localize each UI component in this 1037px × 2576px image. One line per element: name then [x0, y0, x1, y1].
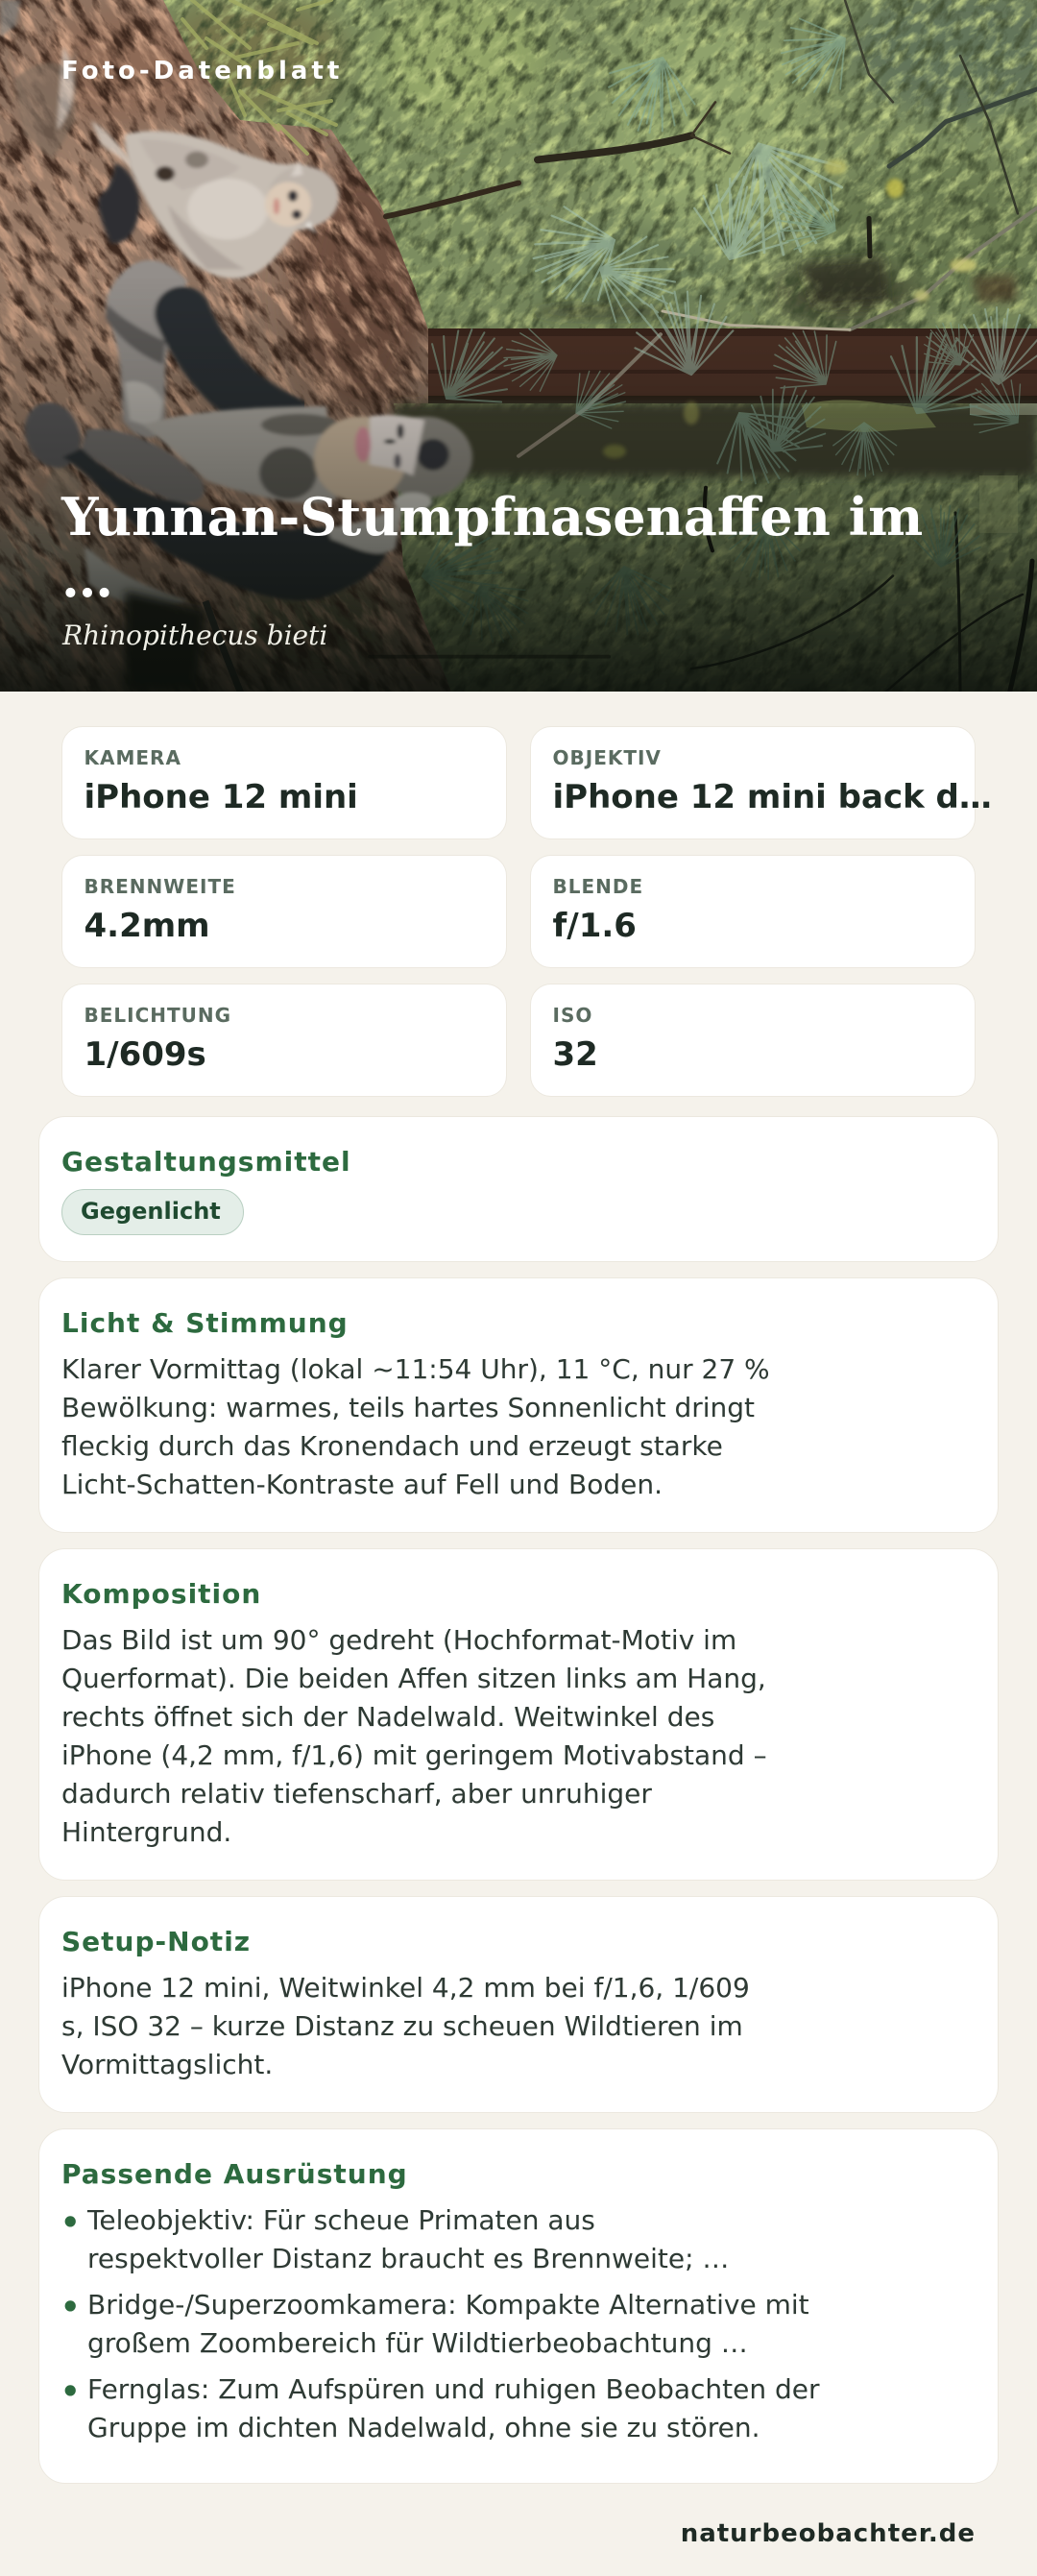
- stat card: Brennweite: [61, 855, 507, 968]
- body text: Hintergrund.: [61, 1816, 231, 1848]
- stat card: Belichtung: 1/609s: [84, 1035, 206, 1074]
- adult monkey foot: [98, 163, 139, 243]
- tag: Gegenlicht: Gegenlicht: [81, 1198, 221, 1225]
- body text: dadurch relativ tiefenscharf, aber unruhiger: [61, 1778, 652, 1810]
- body text: [61, 1972, 750, 2080]
- stat card: Blende: BLENDE: [553, 875, 643, 898]
- photo base colours: [0, 0, 1037, 692]
- body text: Das Bild ist um 90° gedreht (Hochformat-Motiv im: [61, 1624, 736, 1656]
- list item: Bridge-/Superzoomkamera: [60, 2288, 809, 2359]
- adult monkey body and face: [15, 395, 472, 607]
- hero photo: two monkeys on a slope beside pine forest: [0, 0, 1037, 692]
- body text: Licht-Schatten-Kontraste auf Fell und Boden.: [61, 1469, 663, 1500]
- list item: Teleobjektiv: Teleobjektiv: Für scheue Primaten aus: [87, 2204, 595, 2236]
- bottom darkening gradient: [0, 0, 1037, 692]
- body text: rechts öffnet sich der Nadelwald. Weitwinkel des: [61, 1701, 714, 1733]
- body text: Querformat). Die beiden Affen sitzen links am Hang,: [61, 1663, 766, 1694]
- list item: Fernglas: Fernglas: Zum Aufspüren und ruhigen Beobachten der: [87, 2373, 820, 2405]
- pine needle tufts: [411, 4, 1037, 657]
- body text: Klarer Vormittag (lokal ~11:54 Uhr), 11 °C, nur 27 %: [61, 1353, 770, 1385]
- heading: Setup-Notiz: [61, 1926, 251, 1957]
- stat card: Objektiv: OBJEKTIV: [553, 746, 662, 769]
- panel: Komposition: [38, 1548, 999, 1881]
- stat card: Blende: f/1.6: [553, 907, 637, 945]
- panel: Gestaltungsmittel: [38, 1116, 999, 1262]
- list item: Teleobjektiv: respektvoller Distanz braucht es Brennweite; …: [87, 2243, 729, 2274]
- stat card: Belichtung: BELICHTUNG: [84, 1004, 231, 1027]
- list item: Bridge-/Superzoomkamera: Bridge-/Superzoomkamera: Kompakte Alternative mit: [87, 2289, 809, 2321]
- stat card: ISO: [530, 984, 976, 1097]
- body text: [61, 1624, 767, 1848]
- heading: Gestaltungsmittel: [61, 1146, 351, 1178]
- stat card: Belichtung: [61, 984, 507, 1097]
- body text: s, ISO 32 – kurze Distanz zu scheuen Wildtieren im: [61, 2010, 743, 2042]
- low dark tree shadow: [125, 591, 206, 692]
- list item: Fernglas: [60, 2372, 820, 2443]
- body text: [61, 1353, 770, 1500]
- stat card: Brennweite: 4.2mm: [84, 907, 210, 945]
- branches and twigs: [370, 0, 1037, 698]
- footer brand: naturbeobachter.de: [681, 2519, 976, 2548]
- stat card: Objektiv: [530, 726, 976, 839]
- hero title: [61, 486, 923, 609]
- panel: Licht und Stimmung: [38, 1277, 999, 1533]
- young monkey: [125, 131, 339, 279]
- stat card: Kamera: KAMERA: [84, 746, 181, 769]
- panel: Passende Ausrüstung: [38, 2128, 999, 2484]
- stat card: Objektiv: iPhone 12 mini back d…: [553, 778, 992, 816]
- heading: Passende Ausrüstung: [61, 2158, 408, 2190]
- stat card: Kamera: iPhone 12 mini: [84, 778, 358, 816]
- list item: Fernglas: Gruppe im dichten Nadelwald, ohne sie zu stören.: [87, 2412, 760, 2443]
- list item: Bridge-/Superzoomkamera: großem Zoombereich für Wildtierbeobachtung …: [87, 2327, 748, 2359]
- hero title: Yunnan-Stumpfnasenaffen im: [61, 486, 923, 547]
- stone beside the young monkey: [0, 0, 142, 548]
- fallen log: [394, 328, 1037, 533]
- heading: Licht & Stimmung: [61, 1307, 349, 1339]
- body text: Vormittagslicht.: [61, 2049, 273, 2080]
- list item: Teleobjektiv: •: [60, 2203, 80, 2240]
- kicker: Foto-Datenblatt: [61, 57, 343, 85]
- body text: fleckig durch das Kronendach und erzeugt starke: [61, 1430, 723, 1462]
- tag: Gegenlicht: [61, 1189, 244, 1235]
- list item: Fernglas: •: [60, 2372, 80, 2409]
- stat card: Brennweite: BRENNWEITE: [84, 875, 236, 898]
- body text: Bewölkung: warmes, teils hartes Sonnenlicht dringt: [61, 1392, 755, 1423]
- fern blades at top: [182, 0, 336, 154]
- list item: Bridge-/Superzoomkamera: •: [60, 2288, 80, 2324]
- body text: iPhone 12 mini, Weitwinkel 4,2 mm bei f/1,6, 1/609: [61, 1972, 750, 2004]
- low trunk: [205, 601, 245, 703]
- list item: Teleobjektiv: [60, 2203, 729, 2274]
- scientific name: Rhinopithecus bieti: [62, 620, 327, 651]
- body text: iPhone (4,2 mm, f/1,6) mit geringem Motivabstand –: [61, 1739, 767, 1771]
- forest shadow patches: [533, 255, 1018, 321]
- heading: Komposition: [61, 1578, 261, 1610]
- yellow highlights: [603, 159, 977, 458]
- hero section: [0, 0, 1037, 692]
- stat card: ISO: 32: [553, 1035, 598, 1074]
- hero title: …: [61, 547, 113, 609]
- stat card: Blende: [530, 855, 976, 968]
- stat card: ISO: ISO: [553, 1004, 592, 1027]
- stat card: Kamera: [61, 726, 507, 839]
- panel: Setup-Notiz: [38, 1896, 999, 2113]
- adult monkey legs and arm: [106, 260, 286, 438]
